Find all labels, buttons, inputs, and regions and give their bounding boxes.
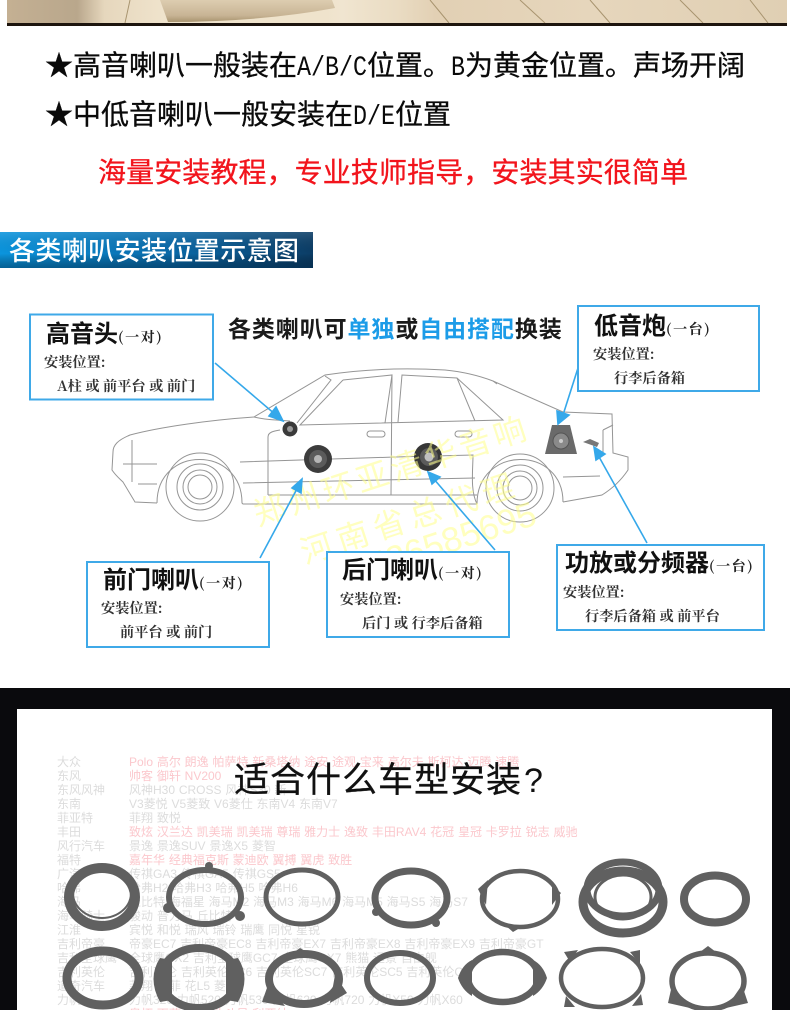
text: tweeter placement note: 位置。	[367, 44, 451, 84]
brand list table: 致炫 汉兰达 凯美瑞 凯美瑞 尊瑞 雅力士 逸致 丰田RAV4 花冠 皇冠 卡罗拉 锐志 威驰	[129, 824, 577, 839]
text: tweeter placement note: 为黄金位置。声场开阔	[465, 44, 745, 84]
title: suitable car models: 适合什么车型安装	[234, 752, 522, 803]
brand list table: Polo 高尔 朗逸 帕萨特 新桑塔纳 途安 途观 宝来 高尔夫 斯柯达 迈腾 速腾	[129, 754, 519, 769]
callout: amplifier or crossover: 功放或分频器(一台)	[565, 543, 754, 578]
section banner: 各类喇叭安装位置示意图	[9, 231, 299, 268]
callout: amplifier or crossover	[557, 543, 764, 630]
brand list table: 宾悦 和悦 瑞风 瑞铃 瑞鹰 同悦 星锐	[129, 922, 320, 937]
brand list table: 广汽	[57, 865, 81, 882]
brand list table: 丰田	[57, 823, 81, 840]
callout: front door speaker: 安装位置:	[101, 598, 163, 618]
icon: amplifier	[583, 439, 599, 447]
brand list table: 大众	[57, 753, 81, 770]
brand list table: 景逸 景逸SUV 景逸X5 菱智	[129, 838, 276, 853]
callout: amplifier or crossover: 行李后备箱 或 前平台	[585, 606, 721, 626]
callout: front door speaker	[87, 560, 269, 647]
brand list table: 骏动 普力马 丘比特	[129, 908, 233, 923]
icon: front door speaker	[304, 445, 332, 473]
brand list table	[57, 753, 577, 1010]
car line drawing	[112, 369, 628, 522]
brand list table: 吉利英伦 吉利英伦SC6 吉利英伦SC7 吉利英伦SC5 吉利英伦C5	[129, 964, 470, 979]
text: tweeter placement note: B	[451, 53, 465, 84]
brand list table: 道奇汽车	[57, 977, 105, 994]
arrow: rear door speaker	[428, 472, 495, 550]
brand list table: 福特	[57, 851, 81, 868]
text: red tutorial message: 海量安装教程，专业技师指导，安装其实很简单	[98, 151, 688, 191]
brand list table: 丘比特 海福星 海马M2 海马M3 海马M6 海马M5 海马S5 海马S7	[129, 894, 468, 909]
brand list table: 风行汽车	[57, 837, 105, 854]
brand list table: 帝豪EC7 吉利帝豪EC8 吉利帝豪EX7 吉利帝豪EX8 吉利帝豪EX9 吉利帝豪GT	[129, 936, 544, 951]
brand list table: 力帆	[57, 991, 81, 1008]
brand list table: 吉利全球鹰	[57, 949, 117, 966]
callout: tweeter: A柱 或 前平台 或 前门	[57, 376, 195, 396]
callout: rear door speaker	[327, 550, 509, 637]
callout: tweeter	[30, 314, 213, 400]
icon: tweeter speaker	[282, 422, 298, 436]
brand list table: 东南	[57, 795, 81, 812]
watermark: 郑州环亚清华音响	[249, 409, 534, 533]
icon: subwoofer	[545, 425, 577, 454]
text: mid-bass placement note: 位置	[395, 93, 451, 133]
brand list table: 海马	[57, 893, 81, 910]
brand list table: 全球鹰GX2 吉利全球鹰GC7 全球鹰GX7 熊猫 远景 自由舰	[129, 950, 437, 965]
title: suitable car models: ?	[524, 762, 543, 800]
text: tweeter placement note: A/B/C	[297, 53, 367, 84]
watermark: 河南省总代理	[296, 466, 524, 571]
arrow: subwoofer	[557, 368, 578, 424]
brand list table: 嘉年华 经典福克斯 蒙迪欧 翼搏 翼虎 致胜	[129, 852, 352, 867]
arrow: amplifier	[594, 447, 647, 543]
brand list table: 江淮	[57, 921, 81, 938]
heading: speakers can be swapped: 各类喇叭可单独或自由搭配换装	[228, 310, 563, 344]
brand list table: 东风风神	[57, 781, 105, 798]
watermark	[249, 409, 541, 598]
callout: front door speaker: 前平台 或 前门	[120, 622, 212, 642]
speaker adapter rings	[67, 862, 748, 1009]
text: mid-bass placement note: ★中低音喇叭一般安装在	[45, 93, 353, 133]
black frame panel	[0, 688, 790, 1010]
callout: subwoofer: 行李后备箱	[614, 368, 685, 388]
text: tweeter placement note: ★高音喇叭一般装在	[45, 44, 297, 84]
callout: rear door speaker: 安装位置:	[340, 589, 402, 609]
brand list table: 哈弗	[57, 879, 81, 896]
brand list table: 海马骑士	[57, 907, 105, 924]
brand list table: 东风	[57, 767, 81, 784]
text: tweeter placement note	[45, 44, 745, 84]
brand list table: 传祺GA3 传祺GA5 传祺GS5	[129, 866, 281, 881]
brand list table: 风神H30 CROSS 风神S30 新	[129, 782, 287, 797]
brand list table: 帅客 御轩 NV200	[129, 768, 222, 783]
callout: subwoofer: 安装位置:	[593, 344, 655, 364]
arrow: tweeter	[215, 363, 283, 421]
brand list table: 吉利英伦	[57, 963, 105, 980]
seat photo strip	[7, 0, 787, 26]
callout: front door speaker: 前门喇叭(一对)	[103, 560, 244, 595]
brand list table: 菲翔 致悦	[129, 811, 181, 825]
callout: subwoofer: 低音炮(一台)	[594, 306, 711, 341]
callout: tweeter: 高音头(一对)	[46, 314, 163, 349]
callout: tweeter: 安装位置:	[44, 352, 106, 372]
brand list table: 菲翔 骏菲 花L5 菱智	[129, 978, 238, 993]
callout: rear door speaker: 后门 或 行李后备箱	[362, 613, 483, 633]
brand list table: 菲亚特	[57, 809, 93, 826]
callout: subwoofer	[578, 306, 759, 391]
brand list table: 哈弗H2 哈弗H3 哈弗H5 哈弗H6	[129, 881, 298, 895]
watermark: 13526585695	[325, 494, 541, 598]
brand list table: 吉利帝豪	[57, 935, 105, 952]
arrow: front door speaker	[260, 479, 302, 558]
brand list table: V3菱悦 V5菱致 V6菱仕 东南V4 东南V7	[129, 796, 338, 811]
callout: amplifier or crossover: 安装位置:	[563, 582, 625, 602]
brand list table: 力帆320 力帆520 力帆530 力帆620 力帆720 力帆X50 力帆X60	[129, 992, 463, 1007]
text: mid-bass placement note: D/E	[353, 102, 395, 133]
icon: rear door speaker	[414, 443, 442, 471]
callout: rear door speaker: 后门喇叭(一对)	[342, 550, 483, 585]
